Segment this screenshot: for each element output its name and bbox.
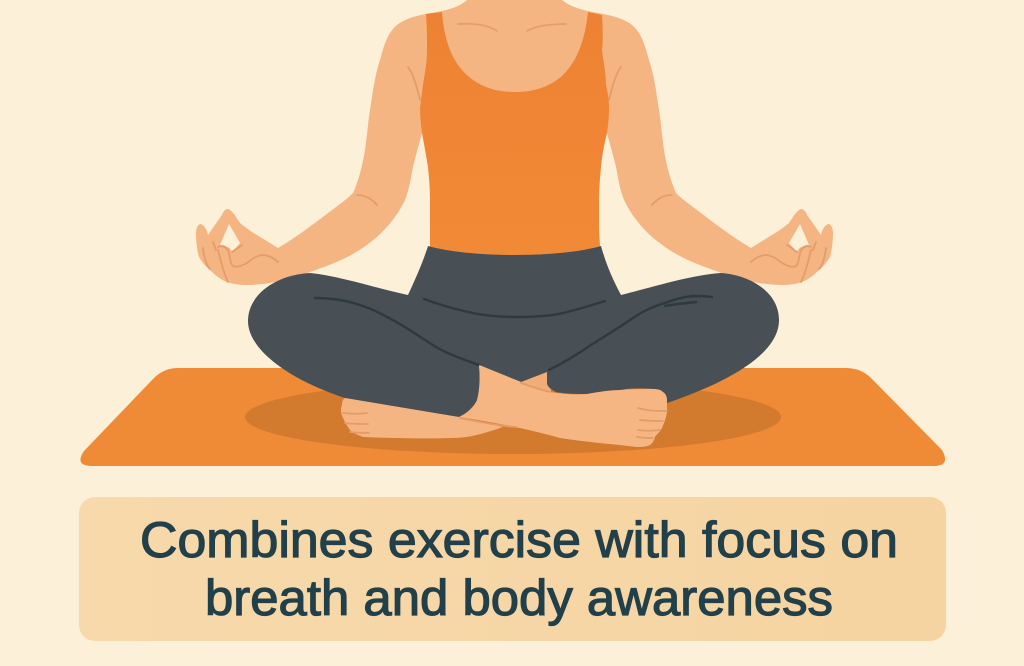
right foot [459,365,667,447]
left foot [341,398,503,438]
right arm and hand [597,14,833,285]
caption line 1: Combines exercise with focus on [140,512,898,568]
right arm [597,14,833,285]
left hand opening [220,224,240,252]
right arm creases [609,67,826,282]
back foot segment [515,371,552,396]
right hand opening [789,224,809,252]
figure [196,0,833,447]
mat shadow [245,380,781,454]
leggings fold lines [315,296,712,370]
caption background [79,497,946,641]
grey leggings [248,246,779,417]
yoga mat [80,368,945,466]
caption line 2: breath and body awareness [205,570,833,626]
collarbone creases [458,24,566,31]
left arm and hand [196,14,432,285]
orange tank top [420,12,609,262]
neck and chest [425,0,604,110]
foot creases [343,383,667,438]
caption panel [79,497,946,641]
left arm [196,14,432,285]
left arm creases [203,67,420,282]
